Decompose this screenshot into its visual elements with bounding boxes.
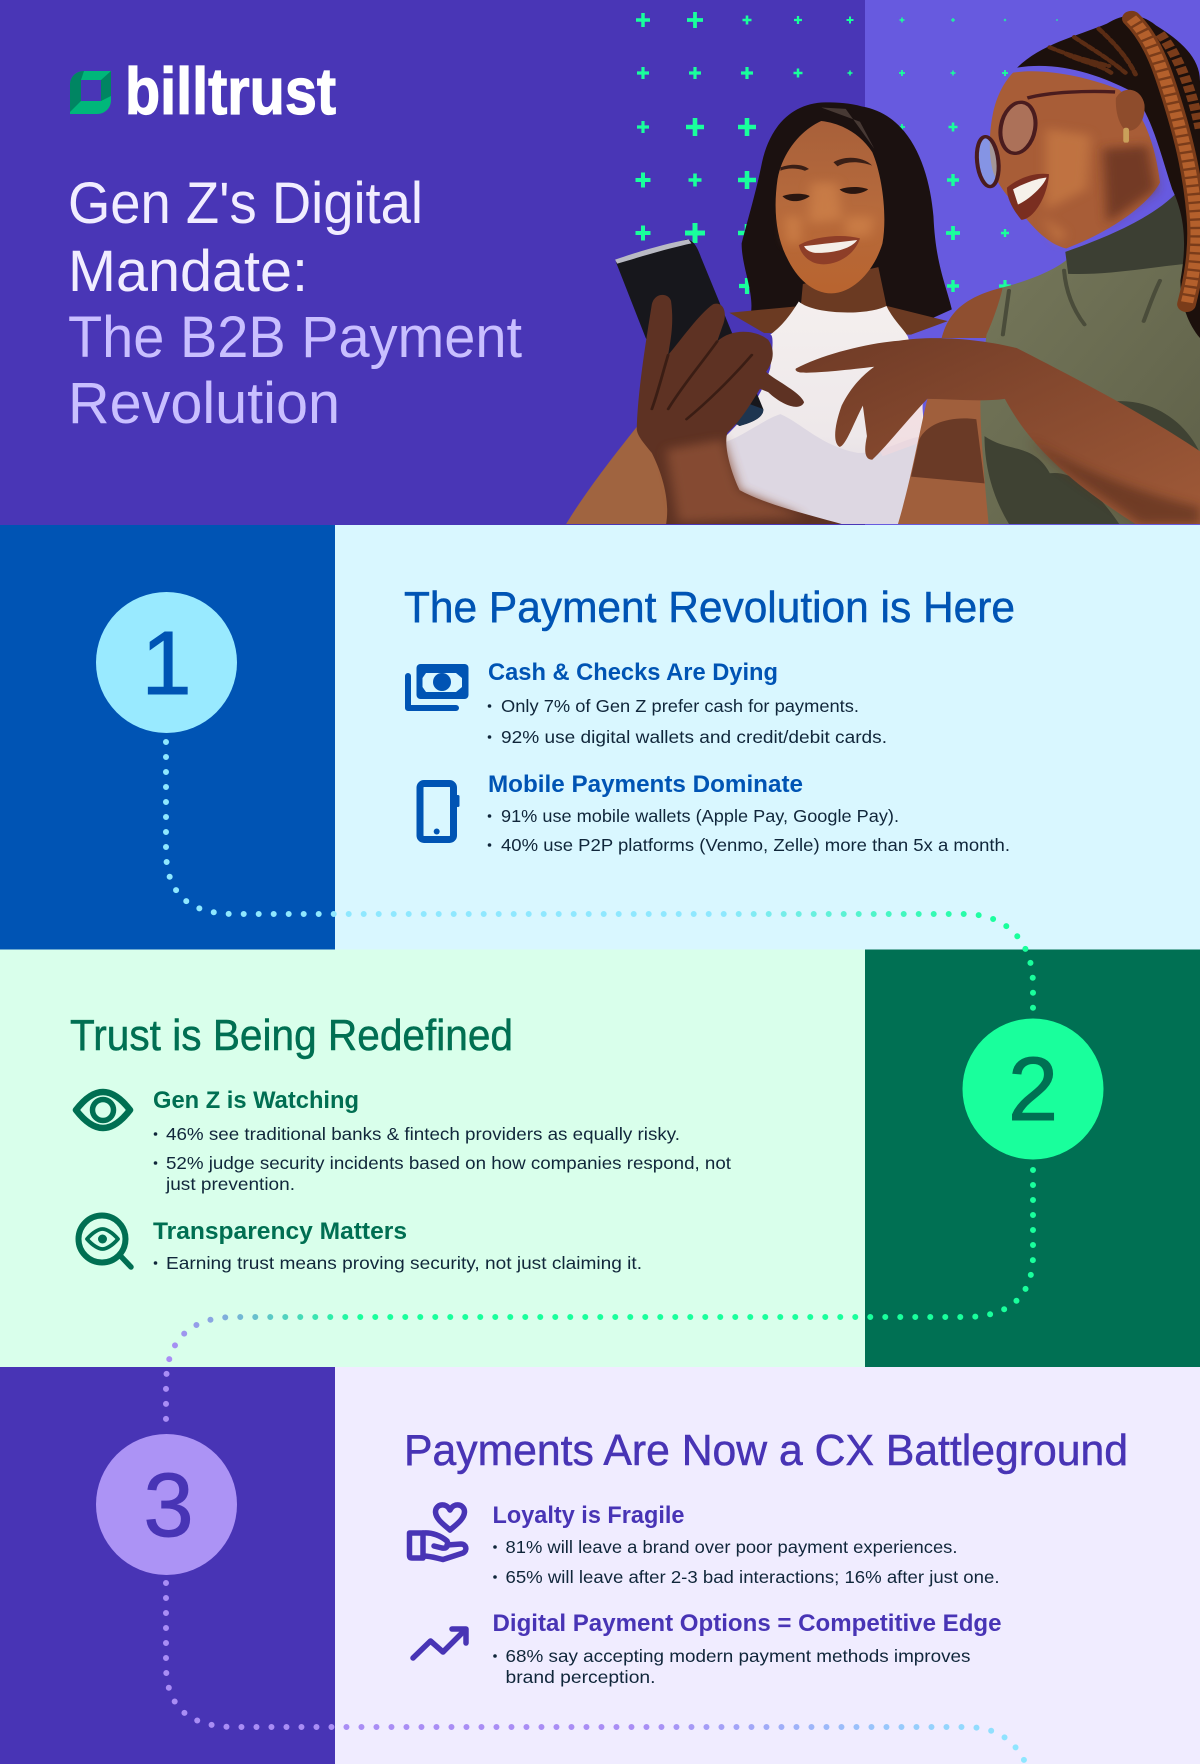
dotted connector: 2 to 3 bbox=[166, 1170, 1033, 1430]
right woman ear and earring bbox=[1116, 90, 1145, 131]
text: loyalty is fragile: Loyalty is Fragile bbox=[492, 1502, 684, 1529]
badge: number 1 bbox=[96, 592, 237, 733]
text: mobile payments bbox=[488, 771, 1010, 855]
right woman turtleneck bbox=[1065, 191, 1189, 274]
title: Revolution bbox=[68, 371, 340, 436]
title: The B2B Payment bbox=[68, 305, 522, 370]
right woman forearm and pointing hand bbox=[796, 338, 1200, 524]
panel: hero bbox=[0, 0, 1200, 525]
logo bbox=[70, 54, 336, 128]
right woman hair and braids bbox=[1017, 16, 1200, 338]
badge: number 3: 3 bbox=[143, 1456, 194, 1556]
text: cash and checks bbox=[488, 659, 887, 747]
panel: section 3 bbox=[0, 1367, 1200, 1764]
icon: trending arrow bbox=[413, 1629, 466, 1658]
text: digital payment options: Digital Payment Options = Competitive Edge bbox=[492, 1610, 1002, 1637]
holding hand bbox=[637, 295, 842, 524]
badge: number 1: 1 bbox=[141, 614, 192, 714]
text: cash and checks: Only 7% of Gen Z prefer cash for payments. bbox=[501, 696, 859, 716]
text: loyalty is fragile: 65% will leave after 2-3 bad interactions; 16% after just one. bbox=[506, 1567, 1000, 1587]
badge: number 2: 2 bbox=[1008, 1040, 1058, 1140]
icon: cash bbox=[408, 664, 468, 708]
text: gen z is watching: just prevention. bbox=[165, 1174, 295, 1194]
left woman arm bbox=[566, 426, 668, 524]
laugh bbox=[1007, 174, 1049, 220]
title bbox=[68, 171, 522, 436]
text: digital payment options: brand perception. bbox=[506, 1667, 656, 1687]
heading: the payment revolution: The Payment Revolution is Here bbox=[404, 583, 1015, 632]
dotted connector: 3 onward bbox=[166, 1583, 1024, 1760]
plus pattern bbox=[636, 12, 1058, 294]
panel: section 2 bbox=[0, 950, 1200, 1367]
right woman olive top bbox=[980, 260, 1200, 524]
text: gen z is watching: 52% judge security incidents based on how companies respond, not bbox=[166, 1153, 731, 1173]
badge: number 3 bbox=[96, 1434, 237, 1575]
phone bbox=[616, 239, 763, 426]
right woman face bbox=[990, 71, 1160, 248]
logo wordmark: billtrust bbox=[125, 54, 336, 128]
icon: mobile phone bbox=[420, 784, 460, 840]
title: Mandate: bbox=[68, 239, 308, 304]
badge: number 2 bbox=[962, 1018, 1104, 1160]
text: digital payment options: 68% say accepting modern payment methods improves bbox=[506, 1646, 971, 1666]
title: Gen Z's Digital bbox=[68, 171, 423, 236]
left woman neck and shoulders bbox=[729, 267, 948, 335]
text: transparency matters bbox=[153, 1218, 642, 1273]
left woman face bbox=[776, 121, 884, 293]
text: transparency matters: Transparency Matters bbox=[153, 1218, 407, 1245]
text: gen z is watching bbox=[153, 1087, 731, 1194]
logo mark bbox=[70, 71, 111, 114]
text: cash and checks: Cash & Checks Are Dying bbox=[488, 659, 778, 686]
text: mobile payments: 40% use P2P platforms (Venmo, Zelle) more than 5x a month. bbox=[501, 835, 1010, 855]
heading: payments cx battleground: Payments Are Now a CX Battleground bbox=[404, 1426, 1128, 1475]
text: loyalty is fragile bbox=[492, 1502, 1000, 1587]
dotted connector: 1 to 2 bbox=[166, 742, 1033, 1012]
left woman hair bbox=[742, 102, 952, 330]
icon: eye bbox=[76, 1092, 130, 1128]
text: cash and checks: 92% use digital wallets and credit/debit cards. bbox=[501, 727, 887, 747]
text: mobile payments: Mobile Payments Dominate bbox=[488, 771, 803, 798]
glasses bbox=[975, 91, 1115, 187]
text: digital payment options bbox=[492, 1610, 1002, 1687]
icon: hand with heart bbox=[410, 1505, 466, 1560]
text: gen z is watching: 46% see traditional banks & fintech providers as equally risky. bbox=[166, 1124, 680, 1144]
photo: two women looking at a phone bbox=[566, 16, 1200, 524]
text: loyalty is fragile: 81% will leave a brand over poor payment experiences. bbox=[506, 1537, 958, 1557]
heading: trust is being redefined: Trust is Being Redefined bbox=[70, 1011, 513, 1060]
text: transparency matters: Earning trust means proving security, not just claiming it. bbox=[166, 1253, 642, 1273]
text: gen z is watching: Gen Z is Watching bbox=[153, 1087, 359, 1114]
right woman upper arm bbox=[942, 287, 1003, 338]
icon: magnifying glass with eye bbox=[78, 1216, 131, 1267]
left woman white top bbox=[726, 302, 924, 453]
text: mobile payments: 91% use mobile wallets (Apple Pay, Google Pay). bbox=[501, 806, 899, 826]
panel: section 1 bbox=[0, 525, 1200, 950]
